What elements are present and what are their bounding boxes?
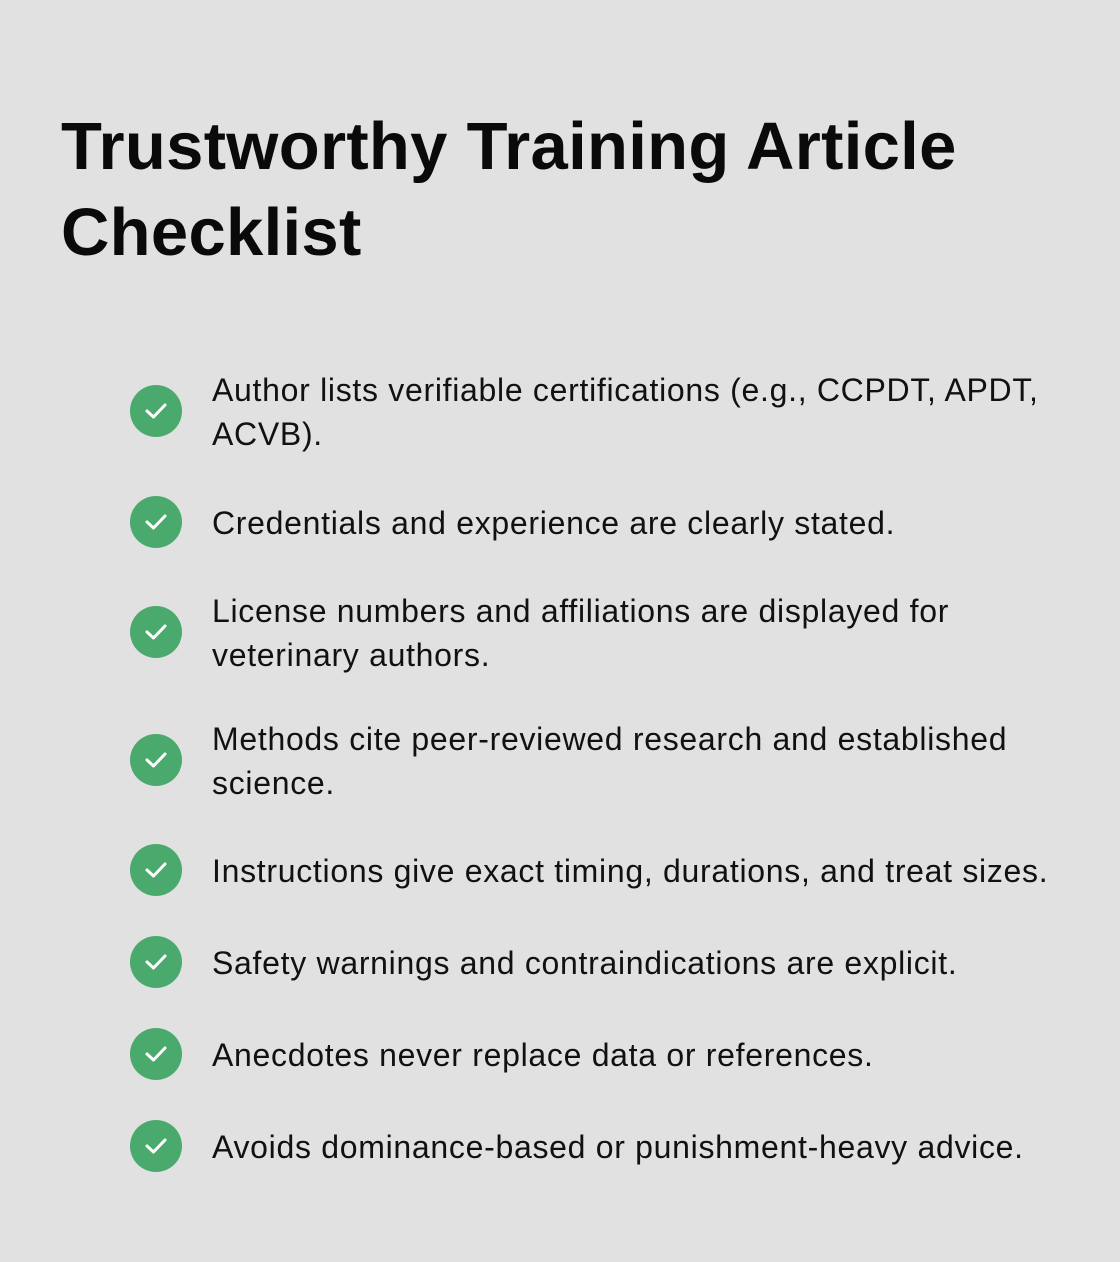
icon: check <box>130 496 182 548</box>
text <box>212 372 1039 452</box>
text: Author lists verifiable certifications (e.g., CCPDT, APDT, <box>212 372 1039 408</box>
item 7 <box>130 1028 874 1080</box>
text: Anecdotes never replace data or references. <box>212 1037 874 1073</box>
text: veterinary authors. <box>212 637 490 673</box>
title <box>61 109 957 270</box>
item 6 <box>130 936 957 988</box>
item 3 <box>130 593 949 673</box>
item 1 <box>130 372 1039 452</box>
icon: check <box>130 385 182 437</box>
icon: check <box>130 844 182 896</box>
title: Checklist <box>61 195 362 270</box>
text <box>212 721 1007 801</box>
item 5 <box>130 844 1048 896</box>
text: Avoids dominance-based or punishment-heavy advice. <box>212 1129 1024 1165</box>
item 4 <box>130 721 1007 801</box>
text <box>212 593 949 673</box>
text: Methods cite peer-reviewed research and established <box>212 721 1007 757</box>
icon: check <box>130 1028 182 1080</box>
text: Instructions give exact timing, durations, and treat sizes. <box>212 853 1048 889</box>
text: Credentials and experience are clearly stated. <box>212 505 895 541</box>
icon: check <box>130 936 182 988</box>
text: License numbers and affiliations are displayed for <box>212 593 949 629</box>
icon: check <box>130 606 182 658</box>
text: Safety warnings and contraindications are explicit. <box>212 945 957 981</box>
icon: check <box>130 734 182 786</box>
text: science. <box>212 765 335 801</box>
text: ACVB). <box>212 416 323 452</box>
item 8 <box>130 1120 1024 1172</box>
icon: check <box>130 1120 182 1172</box>
item 2 <box>130 496 895 548</box>
title: Trustworthy Training Article <box>61 109 957 184</box>
